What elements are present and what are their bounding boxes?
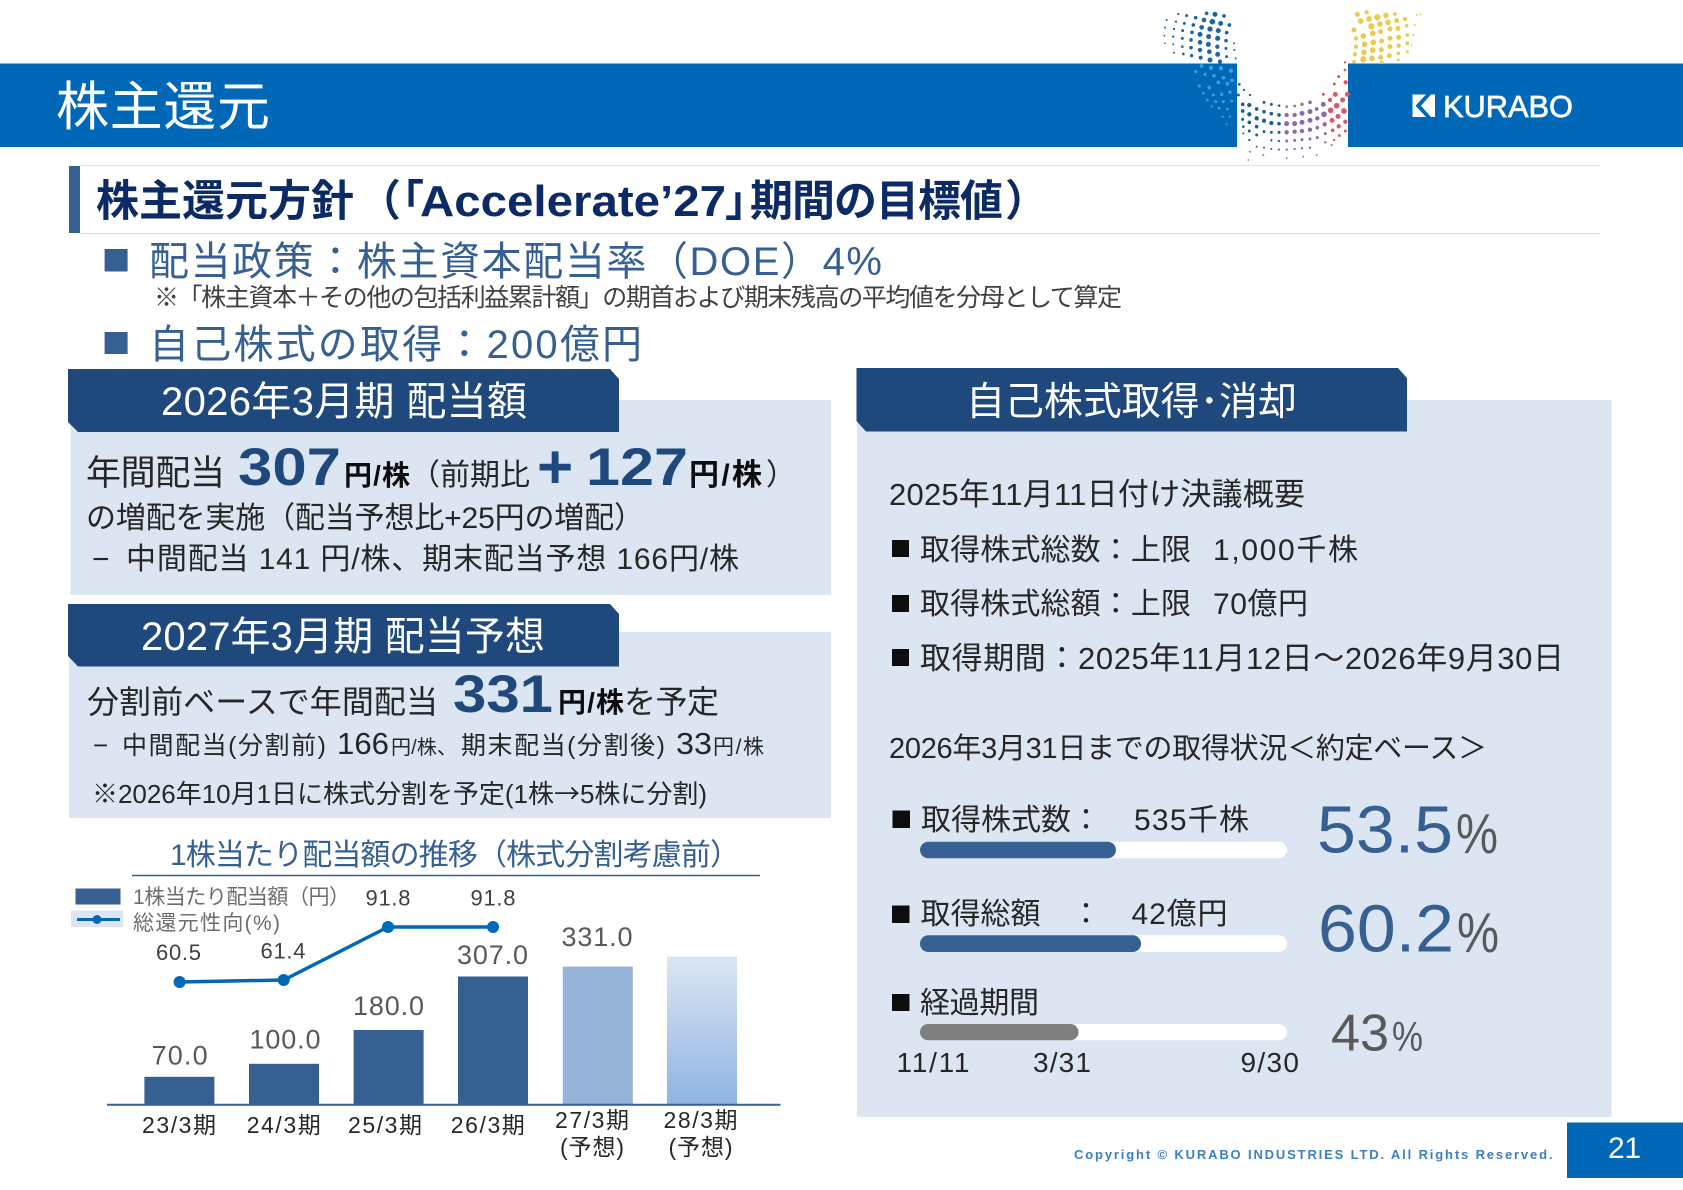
panel: share buyback and cancellation: 自己株式取得･消却 — [966, 381, 1297, 424]
panel: FY2027 dividend forecast: 円/株 — [713, 736, 764, 759]
progress: amount acquired: 60.2 — [1318, 892, 1454, 967]
section heading: 」 — [725, 178, 768, 226]
bar chart: dividend per share: 331.0 — [562, 922, 632, 952]
bar chart: dividend per share: 307.0 — [457, 940, 528, 970]
bar chart: dividend per share: 100.0 — [250, 1024, 320, 1054]
panel: FY2026 dividend: − — [92, 543, 110, 576]
progress: shares acquired — [892, 793, 1498, 868]
chart legend: 総還元性向(%) — [133, 912, 280, 935]
bar chart: dividend per share: 23/3期 — [142, 1112, 216, 1138]
progress: amount acquired: 42億円 — [1132, 898, 1228, 931]
section heading: ） — [1005, 178, 1048, 226]
section heading — [69, 166, 1600, 234]
line chart: total return ratio: 61.4 — [260, 938, 306, 964]
policy bullet: buyback: 自己株式の取得：200億円 — [149, 323, 642, 367]
panel: FY2026 dividend: 127 — [586, 438, 688, 497]
bar chart: dividend per share: 27/3期 — [555, 1107, 629, 1133]
decorative dot arc — [1164, 11, 1421, 160]
chart title: 1株当たり配当額の推移（株式分割考慮前） — [170, 839, 740, 872]
panel: FY2027 dividend forecast: ※2026年10月1日に株式分割を予定(1株→5株に分割) — [92, 774, 707, 811]
resolution summary: 1,000千株 — [1213, 534, 1358, 567]
bar chart: dividend per share: 26/3期 — [451, 1112, 525, 1138]
panel: FY2027 dividend forecast: を予定 — [624, 684, 719, 720]
panel: FY2026 dividend: ） — [766, 459, 796, 492]
progress: shares acquired: % — [1456, 802, 1498, 866]
panel: FY2026 dividend: 年間配当 — [86, 454, 225, 493]
chart legend — [71, 886, 350, 935]
progress: elapsed period: 経過期間 — [920, 987, 1039, 1020]
resolution summary: 2025年11月11日付け決議概要 — [889, 477, 1305, 512]
header band: left — [0, 64, 1237, 147]
resolution summary: 70億円 — [1213, 588, 1308, 621]
panel: FY2026 dividend — [68, 369, 831, 595]
resolution summary: 取得株式総額：上限 — [920, 588, 1191, 621]
panel: FY2026 dividend: 円/株 — [689, 459, 762, 492]
panel: FY2026 dividend: 中間配当 141 円/株、期末配当予想 166円/株 — [126, 543, 739, 576]
line chart: total return ratio — [156, 886, 516, 988]
progress: amount acquired: 取得総額 — [920, 898, 1040, 931]
progress: elapsed period: 3/31 — [1033, 1047, 1091, 1078]
bar chart: dividend per share: (予想) — [560, 1134, 624, 1160]
progress: elapsed period: 11/11 — [896, 1047, 970, 1078]
progress: elapsed period: 9/30 — [1240, 1047, 1299, 1078]
progress: elapsed period: 43 — [1331, 1005, 1389, 1063]
panel: FY2026 dividend: の増配を実施（配当予想比+25円の増配） — [86, 502, 644, 535]
header band: right — [1348, 64, 1683, 147]
panel: FY2026 dividend: 2026年3月期 配当額 — [161, 380, 527, 424]
resolution summary: 取得株式総数：上限 — [920, 534, 1191, 567]
panel: FY2027 dividend forecast: 2027年3月期 配当予想 — [141, 615, 545, 659]
bar chart: dividend per share — [107, 922, 780, 1160]
bar chart: dividend per share: 25/3期 — [348, 1112, 422, 1138]
bar chart: dividend per share: 180.0 — [353, 991, 424, 1021]
progress: shares acquired: 取得株式数： — [921, 804, 1101, 837]
panel: FY2027 dividend forecast: 中間配当(分割前) — [122, 732, 326, 760]
page title: 株主還元 — [56, 78, 270, 137]
bar chart: dividend per share: 24/3期 — [247, 1112, 321, 1138]
progress: shares acquired: 53.5 — [1317, 793, 1453, 868]
bar chart: dividend per share: 28/3期 — [664, 1107, 738, 1133]
panel: FY2026 dividend: 円/株 — [344, 460, 410, 491]
progress: elapsed period — [892, 987, 1423, 1078]
section heading: Accelerate’27 — [420, 177, 726, 226]
panel: FY2026 dividend: （前期比 — [410, 459, 530, 492]
line chart: total return ratio: 91.8 — [470, 886, 516, 910]
panel: FY2027 dividend forecast — [68, 604, 831, 818]
progress heading: 2026年3月31日までの取得状況＜約定ベース＞ — [889, 732, 1487, 765]
progress: shares acquired: 535千株 — [1134, 804, 1249, 837]
panel: FY2026 dividend: 307 — [238, 438, 341, 497]
section heading: 「 — [381, 178, 424, 226]
policy footnote: ※「株主資本＋その他の包括利益累計額」の期首および期末残高の平均値を分母として算定 — [154, 284, 1122, 312]
panel: FY2027 dividend forecast: 分割前ベースで年間配当 — [87, 684, 438, 720]
panel: FY2027 dividend forecast: 期末配当(分割後) — [461, 732, 665, 760]
line chart: total return ratio: 91.8 — [366, 886, 410, 910]
progress: elapsed period: % — [1392, 1013, 1423, 1060]
copyright: Copyright © KURABO INDUSTRIES LTD. All Rights Reserved. — [1074, 1147, 1552, 1162]
resolution summary — [889, 477, 1564, 676]
panel: FY2027 dividend forecast: 33 — [676, 726, 712, 761]
bar chart: dividend per share: (予想) — [668, 1134, 732, 1160]
progress: amount acquired: % — [1457, 901, 1499, 965]
panel: FY2027 dividend forecast: 331 — [453, 665, 553, 724]
policy bullet: DOE: 配当政策：株主資本配当率（DOE）4% — [149, 240, 882, 284]
panel: FY2026 dividend: + — [537, 433, 573, 502]
resolution summary: 取得期間：2025年11月12日～2026年9月30日 — [920, 641, 1564, 676]
progress: amount acquired: ： — [1071, 898, 1101, 931]
page number: 21 — [1608, 1132, 1641, 1165]
panel: FY2027 dividend forecast: − — [93, 730, 108, 760]
panel: FY2027 dividend forecast: 円/株 — [558, 687, 624, 718]
section heading: （ — [358, 178, 401, 226]
panel: FY2027 dividend forecast: 円/株、 — [391, 736, 457, 759]
bar chart: dividend per share: 70.0 — [152, 1040, 208, 1070]
page number — [1567, 1122, 1683, 1178]
section heading: 期間の目標値 — [750, 178, 1003, 226]
panel: FY2027 dividend forecast: 166 — [337, 726, 389, 761]
section heading: 株主還元方針 — [96, 178, 354, 226]
progress: amount acquired — [892, 892, 1499, 967]
panel: share buyback and cancellation — [856, 368, 1612, 1117]
line chart: total return ratio: 60.5 — [156, 940, 201, 965]
logo: KURABO: KURABO — [1443, 89, 1573, 124]
chart legend: 1株当たり配当額（円） — [133, 886, 350, 909]
